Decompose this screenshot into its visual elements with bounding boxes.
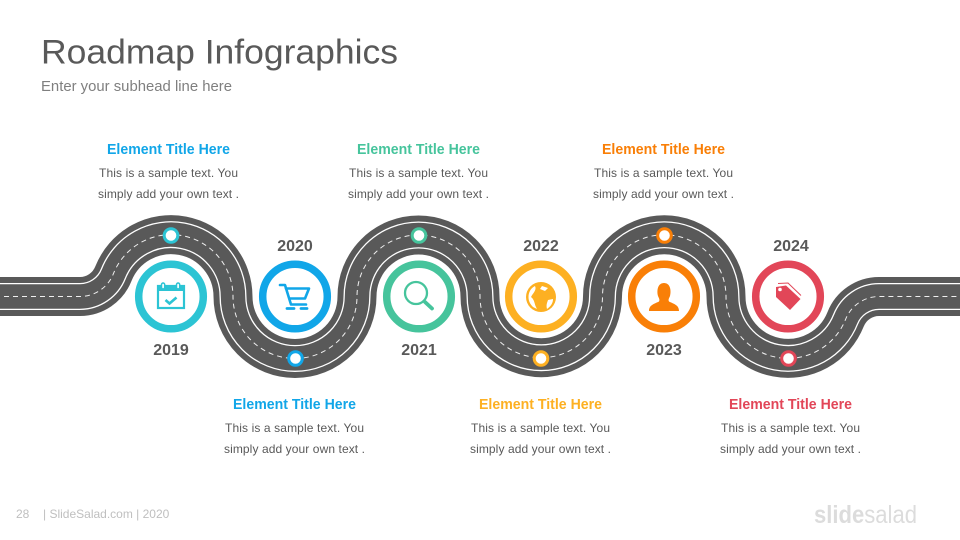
text block 2020: Element Title Here bbox=[233, 397, 356, 413]
text block 2024: simply add your own text . bbox=[720, 442, 861, 456]
text block 2019: simply add your own text . bbox=[98, 187, 239, 201]
text block 2022 bbox=[470, 397, 611, 456]
year labels: 2023 bbox=[646, 342, 682, 359]
text block 2021: This is a sample text. You bbox=[349, 166, 488, 180]
footer: | SlideSalad.com | 2020 bbox=[43, 507, 170, 521]
text block 2024 bbox=[720, 397, 861, 456]
year labels bbox=[153, 238, 809, 359]
text block 2024: This is a sample text. You bbox=[721, 421, 860, 435]
text block 2022: simply add your own text . bbox=[470, 442, 611, 456]
text block 2023: simply add your own text . bbox=[593, 187, 734, 201]
year labels: 2024 bbox=[773, 238, 809, 255]
step 2023: person icon bbox=[632, 264, 696, 329]
road markers bbox=[164, 229, 795, 365]
text block 2024: Element Title Here bbox=[729, 397, 852, 413]
step 2024: tag icon bbox=[756, 264, 820, 329]
text block 2020: This is a sample text. You bbox=[225, 421, 364, 435]
text block 2021 bbox=[348, 142, 489, 201]
text block 2019 bbox=[98, 142, 239, 201]
step 2019: calendar icon bbox=[139, 264, 203, 329]
text block 2020: simply add your own text . bbox=[224, 442, 365, 456]
text block 2022: Element Title Here bbox=[479, 397, 602, 413]
year labels: 2021 bbox=[401, 342, 437, 359]
text block 2021: Element Title Here bbox=[357, 142, 480, 158]
text block 2020 bbox=[224, 397, 365, 456]
text block 2023 bbox=[593, 142, 734, 201]
logo: slidesalad bbox=[814, 501, 917, 529]
footer: 28 bbox=[16, 507, 30, 521]
text block 2019: Element Title Here bbox=[107, 142, 230, 158]
text block 2023: This is a sample text. You bbox=[594, 166, 733, 180]
text block 2022: This is a sample text. You bbox=[471, 421, 610, 435]
winding road bbox=[0, 235, 960, 358]
step 2021: magnifier icon bbox=[387, 264, 451, 329]
year labels: 2022 bbox=[523, 238, 559, 255]
year labels: 2020 bbox=[277, 238, 313, 255]
subhead: Enter your subhead line here bbox=[41, 79, 232, 95]
step 2020: shopping cart icon bbox=[263, 264, 327, 329]
step 2022: globe icon bbox=[509, 264, 573, 329]
year labels: 2019 bbox=[153, 342, 189, 359]
text block 2019: This is a sample text. You bbox=[99, 166, 238, 180]
title: Roadmap Infographics bbox=[41, 34, 398, 72]
text block 2023: Element Title Here bbox=[602, 142, 725, 158]
text block 2021: simply add your own text . bbox=[348, 187, 489, 201]
